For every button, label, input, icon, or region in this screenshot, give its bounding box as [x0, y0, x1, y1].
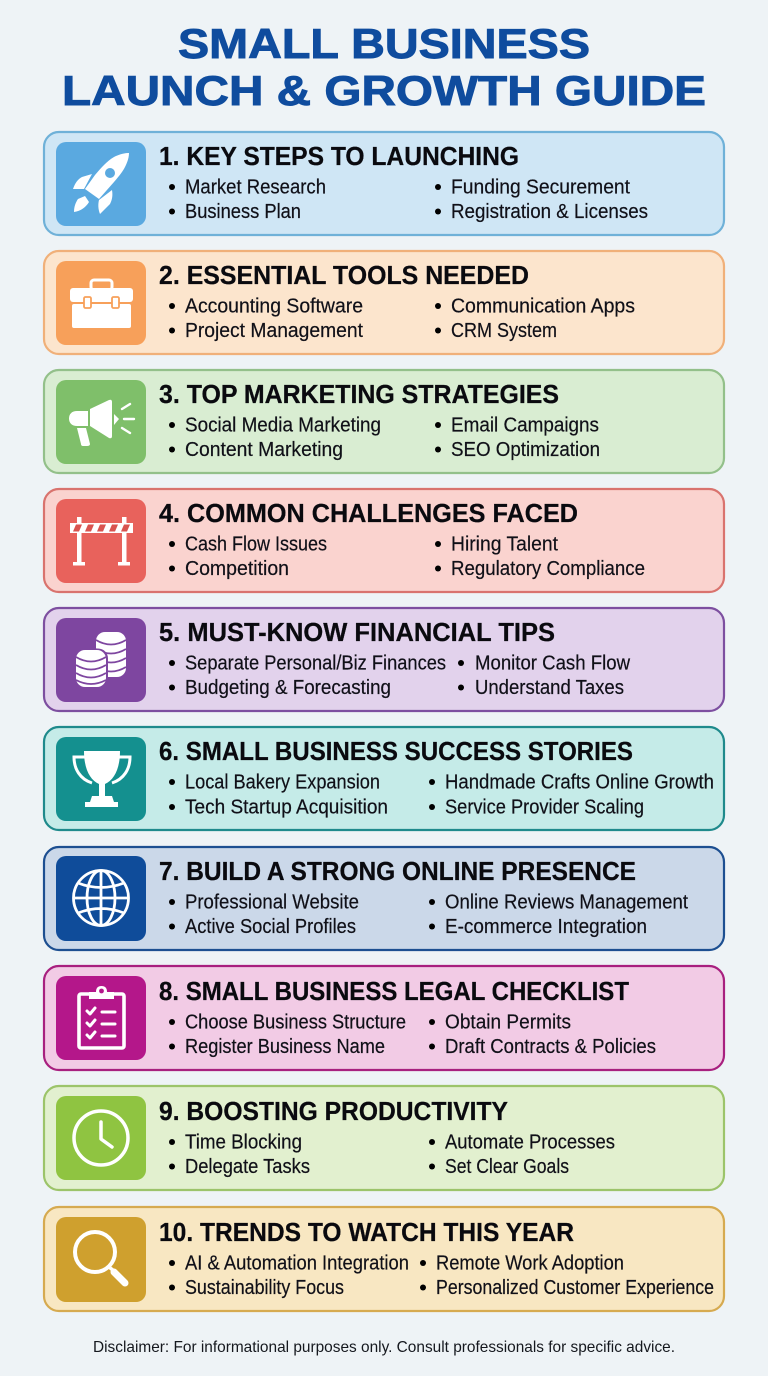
icon: clipboard checklist: [56, 976, 146, 1060]
heading: 7. BUILD A STRONG ONLINE PRESENCE: [159, 858, 636, 886]
list: Obtain Permits: [445, 1012, 571, 1034]
list: [169, 176, 648, 223]
list: CRM System: [451, 320, 557, 342]
icon: megaphone: [56, 380, 146, 464]
heading: 10. TRENDS TO WATCH THIS YEAR: [159, 1219, 574, 1247]
icon: clock: [56, 1096, 146, 1180]
list: [169, 652, 631, 699]
heading: 1. KEY STEPS TO LAUNCHING: [159, 143, 519, 171]
list: Email Campaigns: [451, 414, 599, 436]
list: Market Research: [185, 176, 326, 198]
list: Regulatory Compliance: [451, 558, 645, 580]
list: [169, 296, 635, 342]
list: Cash Flow Issues: [185, 534, 327, 556]
heading: 2. ESSENTIAL TOOLS NEEDED: [159, 262, 529, 290]
list: Choose Business Structure: [185, 1012, 406, 1034]
panel: 8 legal checklist: [44, 966, 724, 1070]
heading: 3. TOP MARKETING STRATEGIES: [159, 381, 559, 409]
panel: 9 boosting productivity: [44, 1086, 724, 1190]
list: Automate Processes: [445, 1132, 615, 1154]
panel: 7 online presence: [44, 847, 724, 950]
panel: 1 key steps to launching: [44, 132, 724, 235]
list: AI & Automation Integration: [185, 1252, 409, 1274]
heading: 5. MUST-KNOW FINANCIAL TIPS: [159, 619, 555, 647]
icon: trophy: [56, 737, 146, 821]
panel: 4 common challenges: [44, 489, 724, 592]
list: Sustainability Focus: [185, 1277, 344, 1299]
list: Time Blocking: [185, 1132, 302, 1154]
list: Business Plan: [185, 201, 301, 223]
icon: magnifying glass: [56, 1217, 146, 1302]
list: Remote Work Adoption: [436, 1252, 624, 1274]
list: Handmade Crafts Online Growth: [445, 772, 714, 794]
title: [62, 20, 706, 114]
panel: 5 financial tips: [44, 608, 724, 711]
list: Budgeting & Forecasting: [185, 677, 391, 699]
list: Delegate Tasks: [185, 1156, 310, 1178]
title: LAUNCH & GROWTH GUIDE: [62, 67, 706, 114]
icon: road barrier: [56, 499, 146, 583]
list: [169, 892, 688, 938]
list: SEO Optimization: [451, 439, 600, 461]
list: Draft Contracts & Policies: [445, 1036, 656, 1058]
list: Accounting Software: [185, 296, 363, 318]
list: Communication Apps: [451, 296, 635, 318]
icon: globe: [56, 856, 146, 941]
list: Monitor Cash Flow: [475, 652, 631, 674]
list: Tech Startup Acquisition: [185, 796, 388, 818]
list: [169, 414, 600, 461]
title: SMALL BUSINESS: [178, 20, 590, 67]
list: Content Marketing: [185, 439, 343, 461]
list: Local Bakery Expansion: [185, 772, 380, 794]
list: Online Reviews Management: [445, 892, 688, 914]
list: Understand Taxes: [475, 677, 624, 699]
list: Funding Securement: [451, 176, 630, 198]
list: Professional Website: [185, 892, 359, 914]
list: Set Clear Goals: [445, 1156, 569, 1178]
list: Register Business Name: [185, 1036, 385, 1058]
panel: 6 success stories: [44, 727, 724, 830]
list: Separate Personal/Biz Finances: [185, 652, 446, 674]
list: Competition: [185, 558, 289, 580]
list: [169, 1132, 615, 1178]
icon: rocket: [56, 142, 146, 226]
list: Social Media Marketing: [185, 414, 381, 436]
heading: 6. SMALL BUSINESS SUCCESS STORIES: [159, 738, 633, 766]
list: Registration & Licenses: [451, 201, 648, 223]
list: [169, 534, 645, 580]
list: Active Social Profiles: [185, 916, 356, 938]
icon: toolbox: [56, 261, 146, 345]
list: [169, 772, 714, 818]
list: E-commerce Integration: [445, 916, 647, 938]
list: [169, 1012, 656, 1058]
panel: 2 essential tools: [44, 251, 724, 354]
list: Hiring Talent: [451, 534, 558, 556]
list: Project Management: [185, 320, 363, 342]
heading: 8. SMALL BUSINESS LEGAL CHECKLIST: [159, 978, 629, 1006]
list: Personalized Customer Experience: [436, 1277, 714, 1299]
list: [169, 1252, 714, 1299]
disclaimer: Disclaimer: For informational purposes only. Consult professionals for specific advice.: [93, 1339, 675, 1356]
list: Service Provider Scaling: [445, 796, 644, 818]
panel: 10 trends: [44, 1207, 724, 1311]
heading: 9. BOOSTING PRODUCTIVITY: [159, 1098, 508, 1126]
heading: 4. COMMON CHALLENGES FACED: [159, 500, 578, 528]
panel: 3 marketing strategies: [44, 370, 724, 473]
icon: coin stacks: [56, 618, 146, 702]
